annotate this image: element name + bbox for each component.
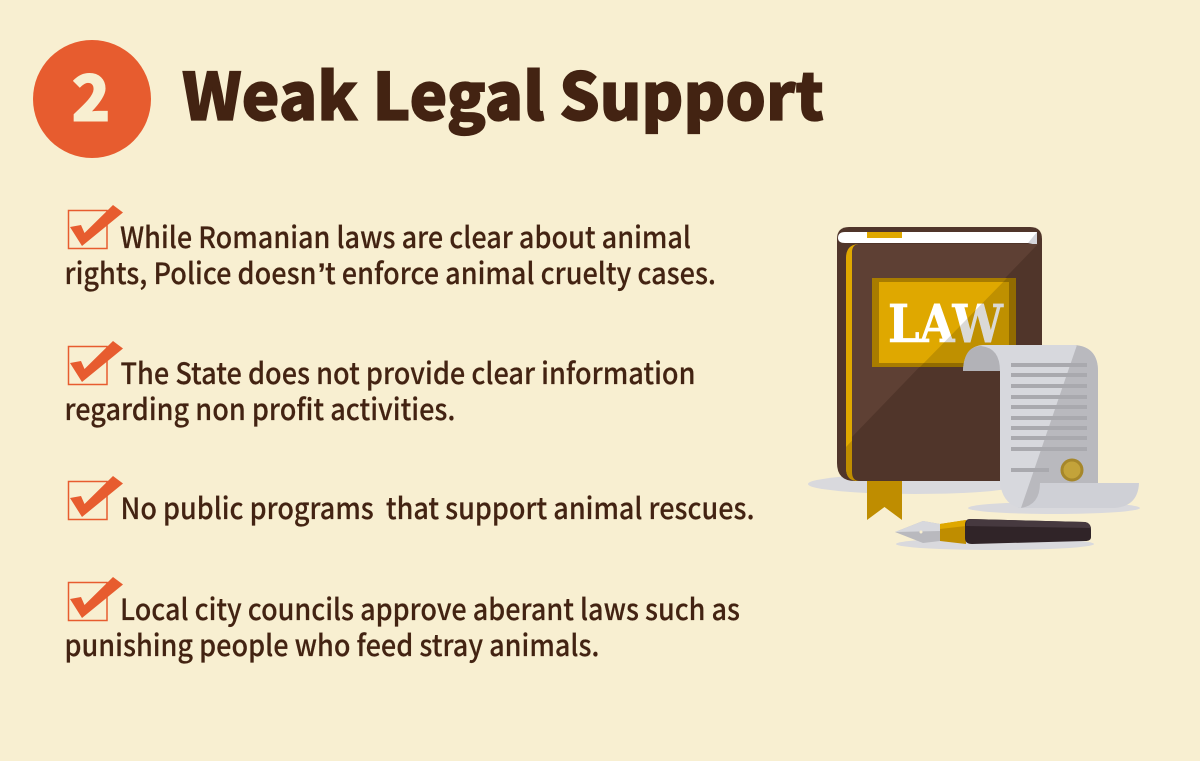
icon: law book xyxy=(837,227,1042,481)
icon: checkbox xyxy=(68,577,123,620)
text block: While Romanian laws are clear about animal xyxy=(120,215,691,257)
illustration: law book, scroll and pen xyxy=(808,227,1140,550)
law plaque: LAW xyxy=(888,294,1004,355)
title: Weak Legal Support xyxy=(182,45,824,139)
icon: checkbox xyxy=(68,476,123,520)
item 3 xyxy=(68,476,754,528)
text block: regarding non profit activities. xyxy=(64,387,456,429)
icon: seal xyxy=(1062,460,1082,480)
number badge xyxy=(33,40,151,158)
item 2 xyxy=(64,341,696,429)
icon: checkbox xyxy=(68,205,123,248)
icon: checkbox xyxy=(68,341,123,384)
number badge: 2 xyxy=(72,48,110,140)
text block: punishing people who feed stray animals. xyxy=(64,623,600,665)
text block: ’ xyxy=(318,258,326,291)
text block: t enforce animal cruelty cases. xyxy=(325,251,716,293)
text block: rights, Police doesn xyxy=(64,251,316,293)
icon: scroll xyxy=(963,345,1139,508)
item 4 xyxy=(64,577,740,665)
item 1 xyxy=(64,205,716,293)
law plaque xyxy=(872,278,1016,367)
text block: No public programs that support animal rescues. xyxy=(120,486,754,528)
lines of text on scroll xyxy=(1011,363,1087,472)
text block: The State does not provide clear information xyxy=(120,351,696,393)
shadows xyxy=(808,474,1140,550)
text block: Local city councils approve aberant laws such as xyxy=(120,587,740,629)
icon: fountain pen xyxy=(895,519,1091,544)
icon: bookmark xyxy=(867,480,902,520)
